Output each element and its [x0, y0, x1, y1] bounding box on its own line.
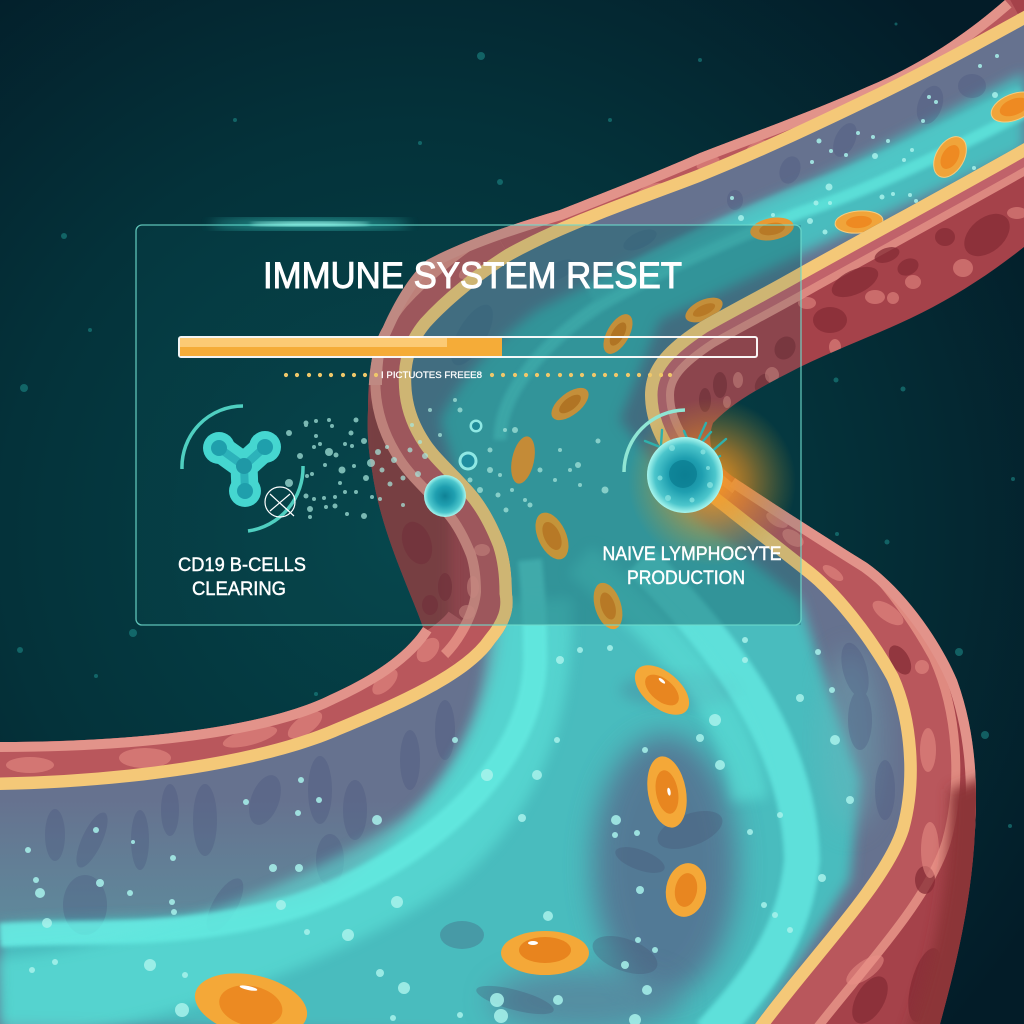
- cell: [511, 436, 535, 484]
- label: CD19 B-cells clearing: CD19 B-CELLS: [178, 554, 306, 576]
- label: naive lymphocyte production: NAIVE LYMPHOCYTE: [602, 543, 782, 565]
- progress caption: I PICTUOTES FREEE8: [381, 370, 482, 380]
- label: CD19 B-cells clearing: CLEARING: [192, 578, 286, 600]
- cell: [933, 136, 967, 178]
- background particles: [17, 22, 1015, 828]
- label: CD19 B-cells clearing: [178, 554, 306, 600]
- cell: [647, 756, 687, 828]
- particle stream: [285, 398, 608, 519]
- cell: [685, 298, 723, 322]
- dark blotches: [45, 74, 986, 937]
- cell highlight: [528, 941, 538, 945]
- cell body: [647, 437, 723, 513]
- cell: [834, 209, 884, 235]
- icon: cleared B-cell antibody: [182, 406, 303, 531]
- cell: [536, 512, 568, 560]
- cell: [750, 218, 794, 240]
- spikes: [645, 423, 726, 461]
- small cells: [424, 420, 482, 517]
- title: IMMUNE SYSTEM RESET: [263, 255, 682, 296]
- outer wall edge: [0, 0, 1005, 830]
- S-curve wall stripe: [411, 260, 512, 680]
- x marker: [265, 487, 295, 517]
- bright flow streams: [500, 112, 1024, 440]
- icon: naive lymphocyte: [624, 398, 796, 566]
- grey-teal gradient: [0, 842, 350, 927]
- cell: [594, 582, 622, 630]
- lower right wall: [720, 510, 904, 1024]
- upper right wall: [666, 167, 1024, 493]
- label: naive lymphocyte production: [602, 543, 782, 589]
- wall blotches: [396, 205, 1018, 1024]
- panel top glow: [210, 219, 410, 229]
- label: naive lymphocyte production: PRODUCTION: [627, 567, 745, 589]
- cell: [666, 863, 706, 917]
- arc left: [182, 406, 243, 469]
- cell: [551, 388, 589, 420]
- cell: [501, 931, 589, 975]
- cell: [194, 973, 308, 1024]
- progress bar: [179, 337, 757, 357]
- cell centre: [519, 937, 571, 963]
- dotted progress line: [284, 373, 672, 377]
- y-shaped molecule: [203, 431, 281, 507]
- dark centre: [593, 735, 737, 995]
- dark outer lower wall: [908, 770, 976, 1024]
- glass panel: [136, 225, 801, 625]
- arc: [624, 410, 685, 472]
- cell: [990, 92, 1024, 122]
- wall-side teal haze: [820, 650, 880, 830]
- cell: [634, 665, 690, 715]
- left and top wall: [0, 643, 495, 790]
- red blood cells: [189, 86, 1024, 1024]
- cell: [604, 314, 632, 354]
- muted lumen behind glass panel: [411, 225, 801, 625]
- arc right: [248, 466, 303, 531]
- orange glow: [628, 398, 796, 566]
